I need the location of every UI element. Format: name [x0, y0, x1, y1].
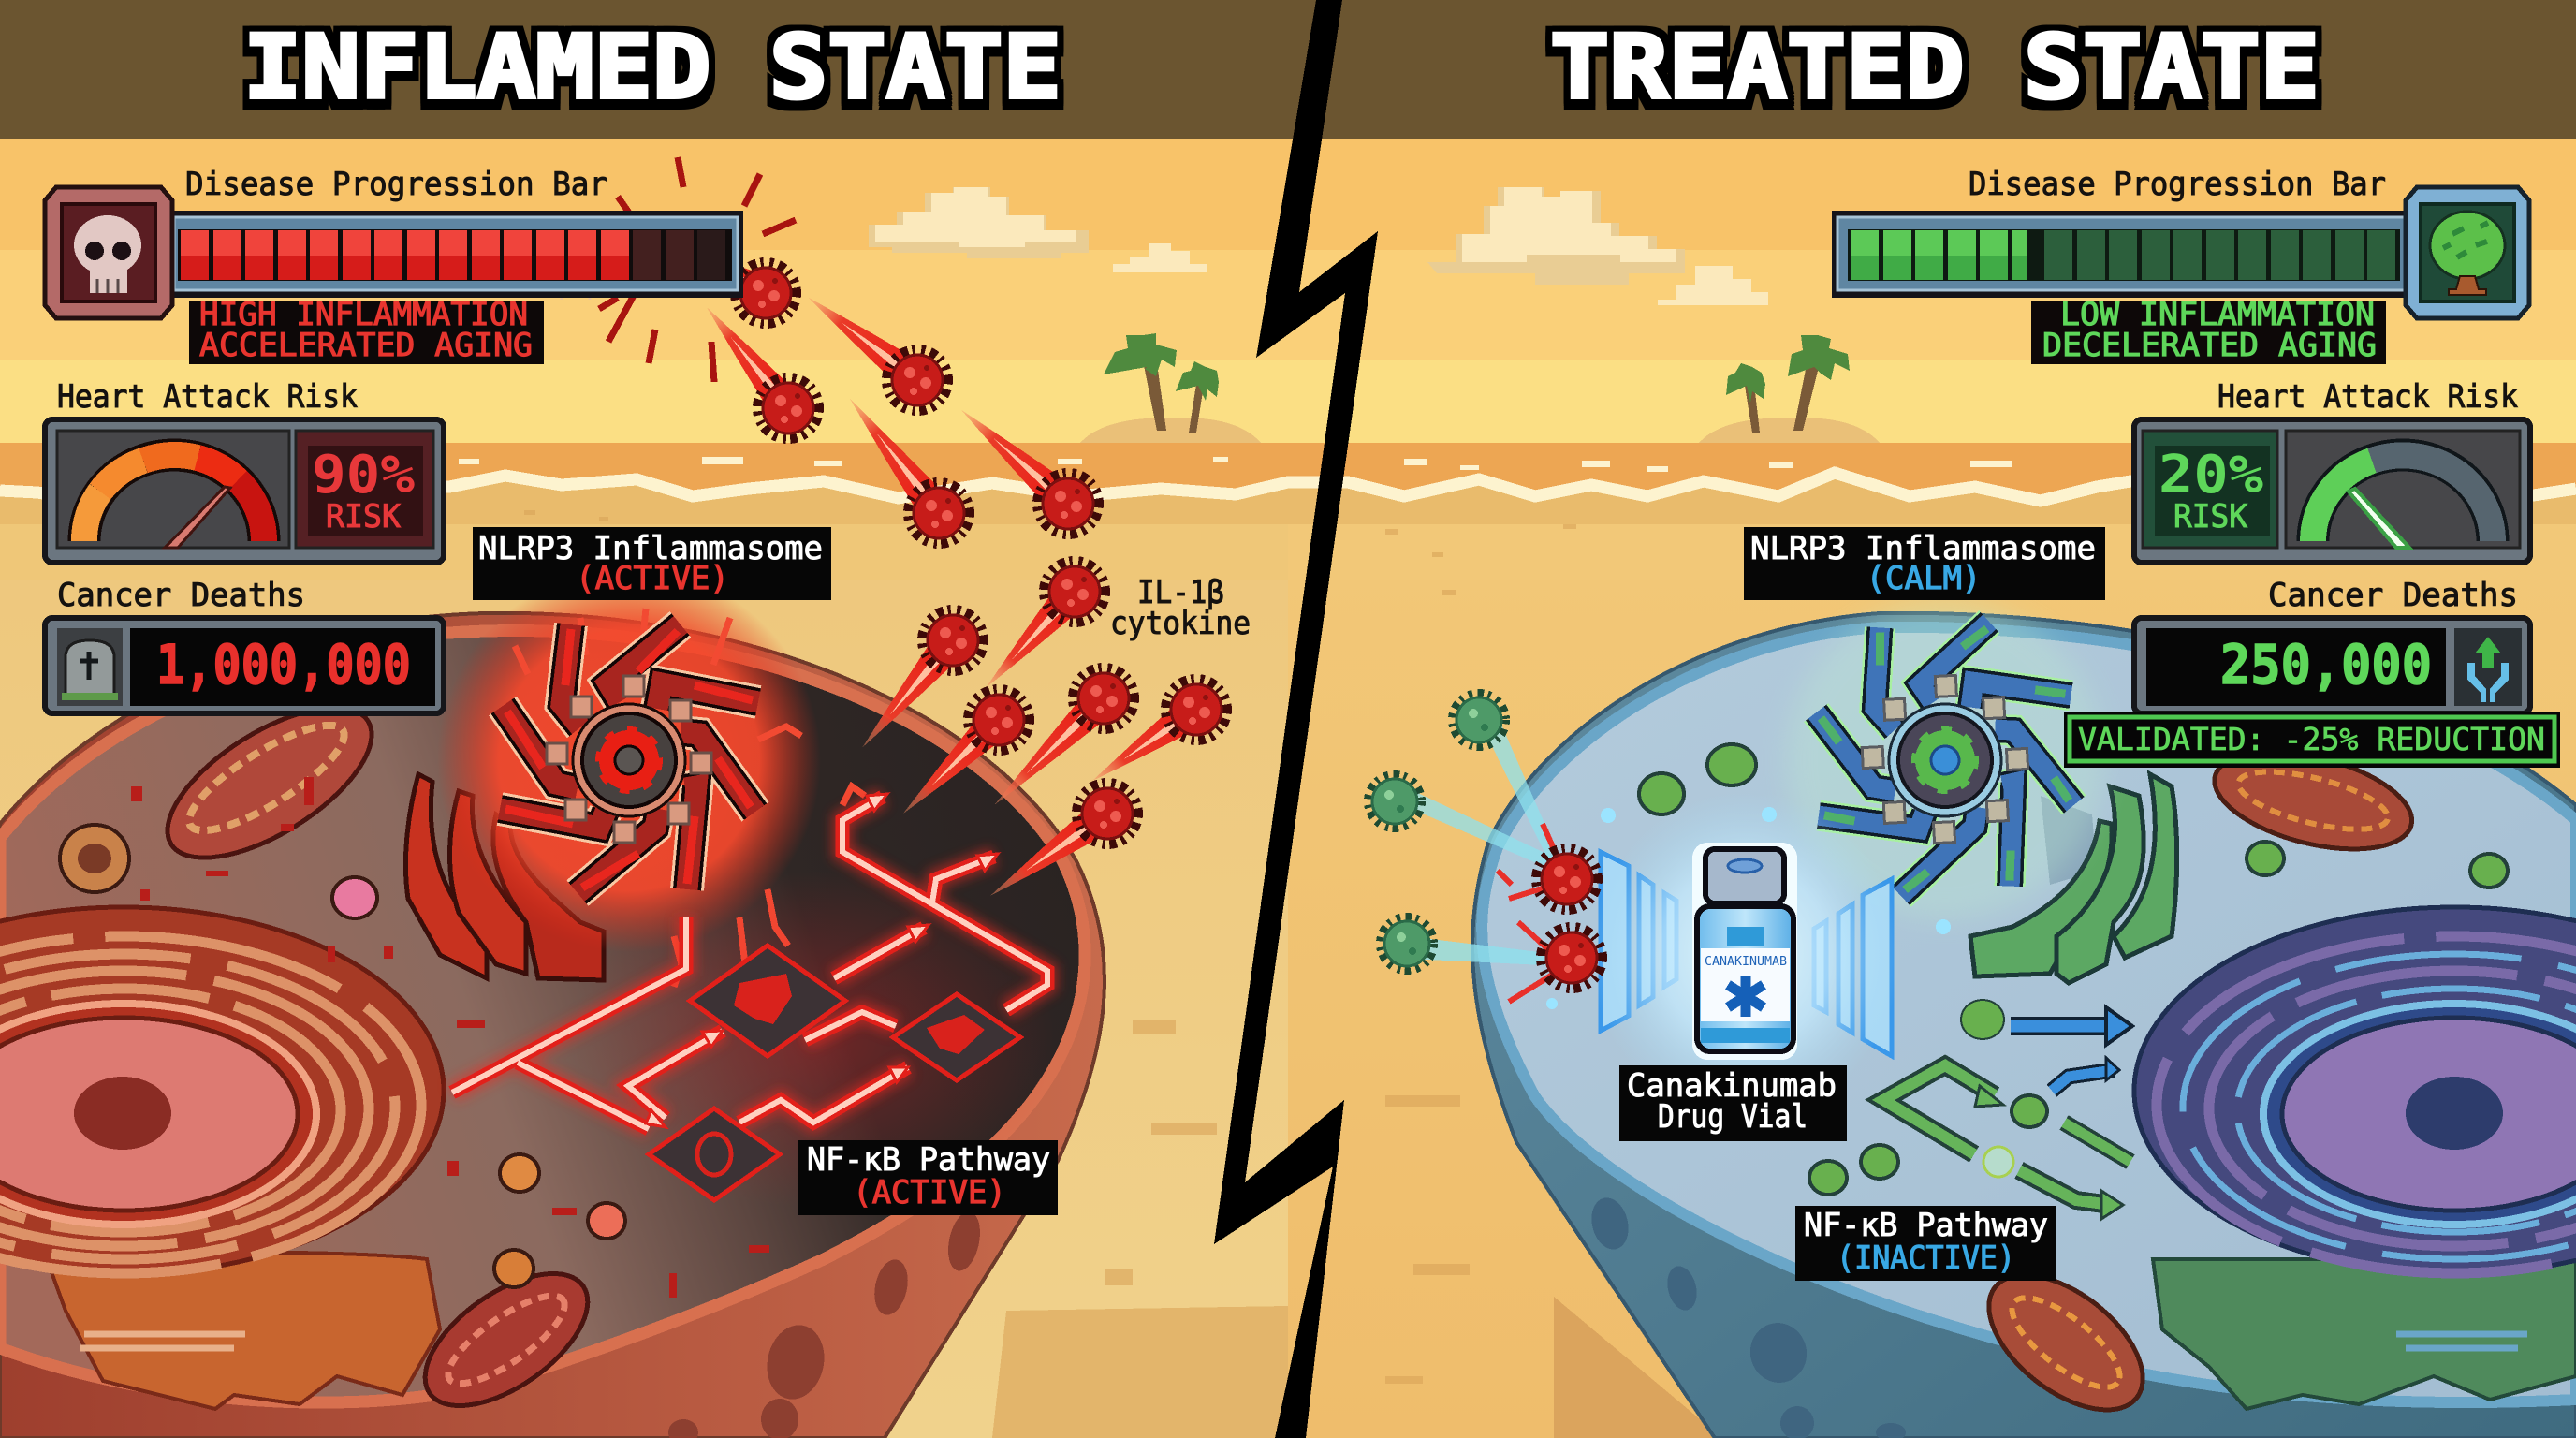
mitochondrion bottom: [1965, 1249, 2167, 1436]
inflammasome glow: [437, 568, 821, 952]
title: treated state: TREATED STATE: [1550, 17, 2320, 119]
small green vesicles: [1639, 744, 2508, 1195]
label: IL-1 beta cytokine: IL-1β: [1137, 574, 1224, 611]
inflammasome glow: [1786, 601, 2104, 919]
label: NF-kB active: NF-κB Pathway: [807, 1141, 1050, 1179]
NF-kB pathway inactive arrows: [1883, 1001, 2132, 1219]
cell pores: [668, 1209, 985, 1438]
lightning divider: [1214, 0, 1378, 1438]
callout: validated reduction: [2064, 712, 2560, 768]
island right with palms: [1699, 335, 1880, 443]
pathway arrowheads: [646, 794, 998, 1127]
heading: Cancer Deaths: [2268, 577, 2518, 614]
cell top surface, right: [1482, 627, 2576, 1402]
small organelles: [60, 825, 625, 1287]
title: inflamed state: INFLAMED STATE: [243, 17, 1061, 119]
NF-kB pathway active: [452, 794, 1058, 1208]
value: 1,000,000: 1,000,000: [156, 633, 411, 697]
label: canakinumab drug vial: Canakinumab: [1627, 1067, 1837, 1105]
mitochondrion bottom: [402, 1248, 610, 1431]
green IL-1 beta cytokines neutralised: [1370, 696, 1951, 1009]
cloud left: [869, 187, 1208, 272]
gauge: [2286, 431, 2520, 548]
nucleus with endoplasmic reticulum: [0, 907, 444, 1409]
cell top surface, left: [0, 631, 1085, 1402]
panel: disease progression, inflamed: [45, 166, 743, 364]
status label: low inflammation: DECELERATED AGING: [2042, 327, 2377, 364]
drug vial: CANAKINUMAB: [1705, 955, 1787, 969]
panel: heart attack risk, treated: [2134, 378, 2530, 563]
gauge: [57, 431, 289, 548]
IL-1 beta cytokines leaving the inflamed cell: [562, 157, 1224, 911]
status label: high inflammation: [189, 296, 544, 364]
value: 250,000: 250,000: [2220, 633, 2432, 697]
label: NLRP3 calm: (CALM): [1866, 560, 1981, 597]
protective shields: [1601, 852, 1892, 1056]
golgi apparatus: [1970, 774, 2177, 983]
icon: tree: [2406, 187, 2529, 318]
panel: cancer deaths, inflamed: [45, 577, 444, 713]
icon: tombstone: [57, 628, 123, 706]
label: NF-kB active: (ACTIVE): [853, 1174, 1006, 1211]
heading: Heart Attack Risk: [57, 378, 358, 416]
icon: hands with upward arrow: [2454, 628, 2522, 706]
status label: low inflammation: LOW INFLAMMATION: [2060, 296, 2375, 333]
label: NF-kB inactive: NF-κB Pathway: [1804, 1207, 2048, 1244]
risk readout: 90%: [296, 431, 433, 548]
risk readout: 90%: 90%: [312, 445, 415, 506]
risk readout: 20%: [2143, 431, 2277, 548]
lightning cracks: [515, 609, 865, 987]
cell membrane wall, left: [0, 613, 1105, 1438]
label: NLRP3 active: (ACTIVE): [576, 560, 729, 597]
label: NLRP3 calm: [1744, 527, 2105, 600]
label: NLRP3 calm: NLRP3 Inflammasome: [1750, 530, 2096, 567]
nucleus with endoplasmic reticulum: [2134, 907, 2576, 1409]
label: canakinumab drug vial: [1619, 1065, 1847, 1141]
burst sparks: [599, 157, 796, 382]
panel: disease progression, treated: [1832, 166, 2529, 364]
golgi apparatus: [405, 774, 604, 980]
inflammasome: [500, 624, 758, 893]
pathway nodes: [649, 946, 1020, 1200]
progress bar: [1832, 211, 2409, 298]
heading: Cancer Deaths: [57, 577, 305, 614]
label: canakinumab drug vial: Drug Vial: [1658, 1098, 1808, 1136]
label: IL-1 beta cytokine: cytokine: [1110, 605, 1251, 642]
status label: high inflammation: HIGH INFLAMMATION: [199, 296, 528, 333]
panel: cancer deaths, treated: [2134, 577, 2530, 713]
status label: high inflammation: ACCELERATED AGING: [199, 327, 533, 364]
risk readout: 20%: 20%: [2159, 445, 2263, 506]
heading: Disease Progression Bar: [185, 166, 607, 203]
cell membrane wall, right: [1472, 613, 2576, 1438]
inflamed cell: [0, 568, 1105, 1438]
inflammasome: [1809, 618, 2081, 900]
progress bar: [168, 211, 743, 298]
label: NLRP3 active: [473, 527, 831, 600]
mitochondrion top: [2204, 734, 2422, 867]
pathway lines: [452, 797, 1047, 1129]
icon: skull: [45, 187, 172, 318]
cloud right: [1427, 187, 1768, 305]
header band: [0, 0, 2576, 139]
heading: Heart Attack Risk: [2217, 378, 2518, 416]
debris: [131, 777, 769, 1298]
panel: heart attack risk, inflamed: [45, 378, 444, 563]
heading: Disease Progression Bar: [1969, 166, 2386, 203]
risk readout: 90%: RISK: [326, 498, 402, 536]
mitochondrion top: [144, 678, 395, 888]
label: NF-kB active: [798, 1140, 1058, 1215]
label: NF-kB inactive: (INACTIVE): [1837, 1240, 2015, 1277]
label: IL-1 beta cytokine: [1110, 574, 1251, 642]
cell pores: [1587, 1194, 1906, 1438]
island left with palms: [1080, 333, 1261, 443]
callout: validated reduction: VALIDATED: -25% REDUCTION: [2078, 721, 2545, 757]
risk readout: 20%: RISK: [2174, 498, 2248, 536]
label: NF-kB inactive: [1795, 1206, 2056, 1281]
label: NLRP3 active: NLRP3 Inflammasome: [478, 530, 823, 567]
status label: low inflammation: [2031, 296, 2386, 364]
treated cell: [1370, 601, 2576, 1438]
drug vial: [1591, 791, 1900, 1119]
